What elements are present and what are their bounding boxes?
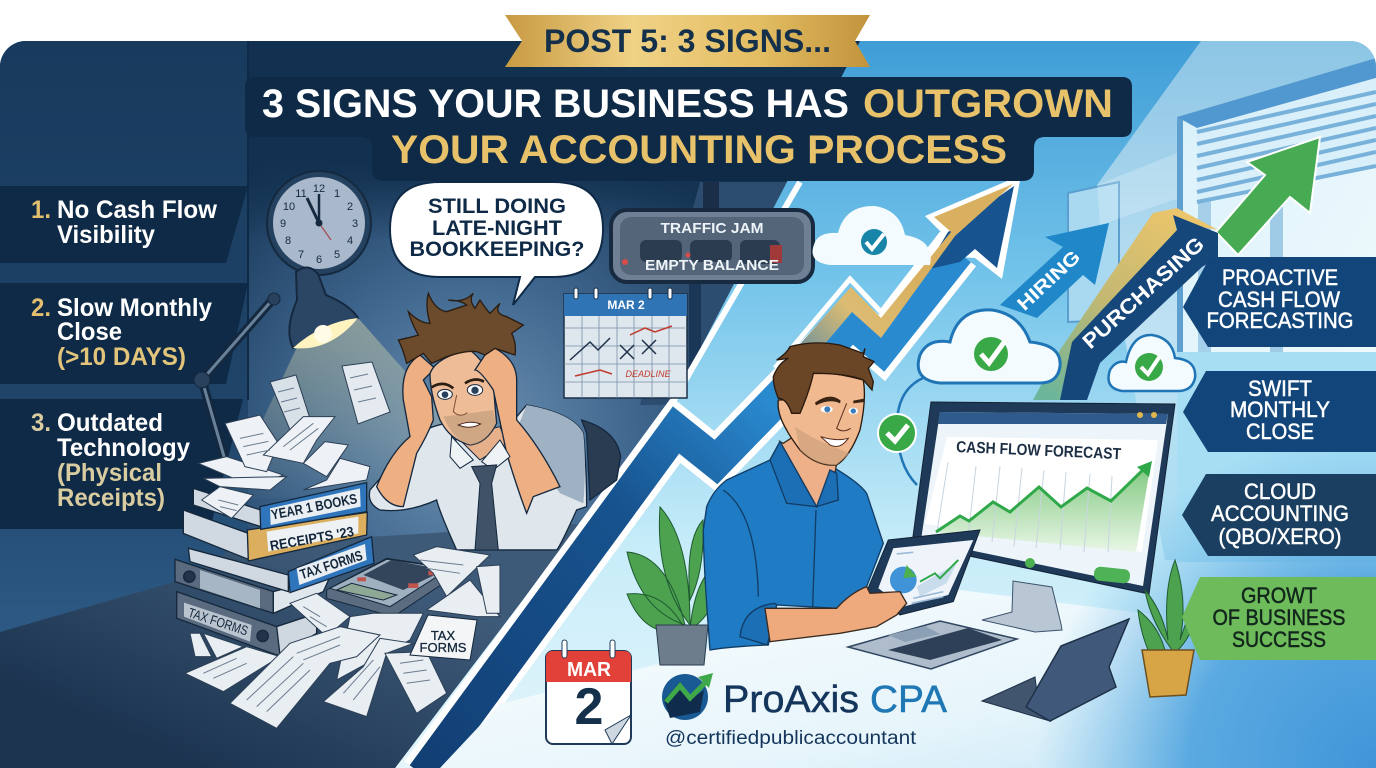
rear view mirror: TRAFFIC JAM <box>660 220 764 237</box>
rear view mirror: EMPTY BALANCE <box>645 257 779 274</box>
tablet in hand <box>867 530 980 615</box>
panel: sign 1: Visibility <box>57 221 155 249</box>
panel: sign 2: (>10 DAYS) <box>57 343 186 371</box>
stubble <box>795 427 850 465</box>
ribbon: post label <box>505 15 870 67</box>
panel: sign 1 <box>0 186 248 263</box>
nose and smile <box>821 403 851 446</box>
desk surface <box>0 524 578 768</box>
icon: bottom calendar: MAR <box>567 659 612 681</box>
panel: growth of business success: SUCCESS <box>1232 627 1326 652</box>
icon: wall clock: 2 <box>347 201 353 213</box>
connector line to check badge <box>897 378 923 485</box>
title: OUTGROWN <box>863 82 1113 126</box>
binder: tax forms bottom: TAX FORMS <box>186 605 250 638</box>
stack of binders <box>175 415 374 655</box>
panel: swift monthly close: SWIFT <box>1248 376 1312 401</box>
panel: cloud accounting <box>1182 474 1376 556</box>
paper: tax forms: TAX <box>431 628 455 643</box>
panel: growth of business success <box>1182 577 1376 660</box>
speech bubble <box>390 182 603 305</box>
floating receipt left <box>270 375 312 430</box>
rear view mirror <box>611 182 813 282</box>
hair <box>398 293 523 363</box>
monitor: CASH FLOW FORECAST <box>956 439 1122 463</box>
illustration: left plant <box>627 507 729 665</box>
calculator <box>327 558 453 617</box>
arrow: hiring: HIRING <box>1014 247 1085 315</box>
arrow: purchasing: PURCHASING <box>1078 233 1209 354</box>
eyes and brows <box>815 397 864 414</box>
logo: ProAxis CPA <box>662 673 948 721</box>
handle: @certifiedpublicaccountant <box>665 728 917 749</box>
icon: wall clock: 3 <box>352 218 358 230</box>
logo: ProAxis CPA: CPA <box>870 679 948 721</box>
panel: cloud accounting: (QBO/XERO) <box>1218 524 1342 549</box>
icon: wall calendar <box>564 288 687 398</box>
panel: sign 3: (Physical <box>57 459 162 487</box>
cloud icon 2 <box>918 310 1060 383</box>
icon: bottom calendar: 2 <box>575 678 603 736</box>
arrow: hiring <box>1000 223 1109 318</box>
icon: wall clock: 6 <box>316 254 322 266</box>
blue corner glow <box>1030 430 1376 768</box>
panel: sign 2 <box>0 283 248 384</box>
panel: cloud accounting: ACCOUNTING <box>1211 501 1349 526</box>
keyboard <box>848 621 1017 669</box>
icon: wall calendar: MAR 2 <box>607 298 645 312</box>
binder: year 1 books: YEAR 1 BOOKS <box>270 490 358 523</box>
panel: sign 3: Technology <box>57 434 190 462</box>
papers on desk <box>185 547 500 728</box>
right arm <box>475 348 560 513</box>
panel: sign 3 <box>0 399 243 529</box>
neck <box>780 437 837 507</box>
panel: sign 1: 1. <box>31 196 51 224</box>
icon: wall clock: 9 <box>280 218 286 230</box>
arm and hand holding tablet <box>765 587 907 642</box>
loose receipts on binders <box>198 415 370 518</box>
gold and blue arrow head <box>775 175 1021 385</box>
panel: sign 3: Receipts) <box>57 484 165 512</box>
shirt <box>369 405 587 550</box>
icon: wall clock: 10 <box>283 201 295 213</box>
panel: swift monthly close: CLOSE <box>1246 419 1314 444</box>
chart: cash flow <box>936 461 1152 552</box>
speech bubble: STILL DOING <box>428 195 566 218</box>
paper: tax forms <box>410 615 477 660</box>
left arm <box>377 355 435 507</box>
illustration: stressed man <box>369 293 621 550</box>
desk: right scene <box>440 590 1210 768</box>
icon: wall calendar: DEADLINE <box>625 369 672 379</box>
icon: wall clock: 4 <box>347 235 353 247</box>
cloud icon 1 <box>813 206 931 265</box>
panel: dark left scene <box>0 41 870 768</box>
nose and mouth <box>453 395 481 427</box>
binder: year 1 books <box>193 483 367 529</box>
collar <box>770 442 838 507</box>
shaded shirt shoulder <box>517 405 585 503</box>
ribbon: post label: POST 5: 3 SIGNS... <box>544 23 831 59</box>
panel: proactive cash flow: FORECASTING <box>1206 308 1354 333</box>
shirt seams <box>723 490 816 607</box>
hair <box>773 343 874 413</box>
speech bubble: BOOKKEEPING? <box>410 238 584 261</box>
sleeve <box>740 603 777 645</box>
paper: tax forms: FORMS <box>420 640 467 655</box>
panel: proactive cash flow <box>1183 257 1376 347</box>
icon: desk lamp <box>194 267 358 460</box>
logo: ProAxis CPA: ProAxis <box>723 679 859 721</box>
binder: receipts <box>183 510 367 561</box>
icon: wall clock: 1 <box>334 188 340 200</box>
icon: wall clock: 7 <box>298 249 304 261</box>
icon: check badge <box>878 414 916 452</box>
cloud icon 3 <box>1108 335 1195 391</box>
panel: cloud accounting: CLOUD <box>1244 479 1316 504</box>
chair <box>582 420 621 500</box>
panel: swift monthly close <box>1183 371 1376 452</box>
arrow: green growth <box>1216 137 1320 255</box>
face <box>430 350 497 445</box>
binder: receipts: RECEIPTS '23 <box>269 523 355 554</box>
shirt <box>703 442 883 650</box>
eyes <box>432 380 484 399</box>
illustration: happy man <box>703 343 883 650</box>
panel: growth of business success: GROWT <box>1241 583 1317 608</box>
binder: grey <box>175 559 330 613</box>
main zigzag growth band <box>423 175 1021 768</box>
speech bubble: LATE-NIGHT <box>432 217 562 240</box>
illustration: right plant <box>1138 560 1200 697</box>
icon: wall clock: 5 <box>334 249 340 261</box>
binder: tax forms bottom <box>177 592 317 655</box>
icon: wall clock: 8 <box>285 235 291 247</box>
cone of lamp light <box>230 318 456 490</box>
neck <box>457 427 507 460</box>
panel: swift monthly close: MONTHLY <box>1230 397 1330 422</box>
panel: sign 3: Outdated <box>57 409 163 437</box>
icon: bottom calendar <box>546 640 631 744</box>
logo mark <box>662 673 713 720</box>
panel: proactive cash flow: PROACTIVE <box>1222 265 1338 290</box>
face <box>778 372 864 465</box>
monitor <box>912 402 1175 632</box>
tie <box>472 465 498 550</box>
panel: growth of business success: OF BUSINESS <box>1212 605 1346 630</box>
second tablet on stand <box>982 619 1129 721</box>
icon: wall clock: 12 <box>313 183 325 195</box>
panel: sign 2: Close <box>57 318 122 346</box>
binder: tax forms blue <box>188 537 374 593</box>
panel: proactive cash flow: CASH FLOW <box>1218 287 1340 312</box>
floating receipt right <box>342 362 390 424</box>
collar <box>450 437 510 470</box>
stubble <box>443 410 496 445</box>
title: YOUR ACCOUNTING PROCESS <box>391 128 1007 172</box>
panel: sign 1: No Cash Flow <box>57 196 218 224</box>
icon: wall clock: 11 <box>295 188 307 200</box>
panel: sign 2: 2. <box>31 294 51 322</box>
panel: sign 2: Slow Monthly <box>57 294 212 322</box>
arrow: purchasing <box>1033 208 1218 400</box>
title: 3 SIGNS YOUR BUSINESS HAS <box>262 82 849 126</box>
binder: tax forms blue: TAX FORMS <box>298 547 364 582</box>
icon: wall clock <box>267 171 371 275</box>
panel: sign 3: 3. <box>31 409 51 437</box>
title <box>245 77 1132 181</box>
